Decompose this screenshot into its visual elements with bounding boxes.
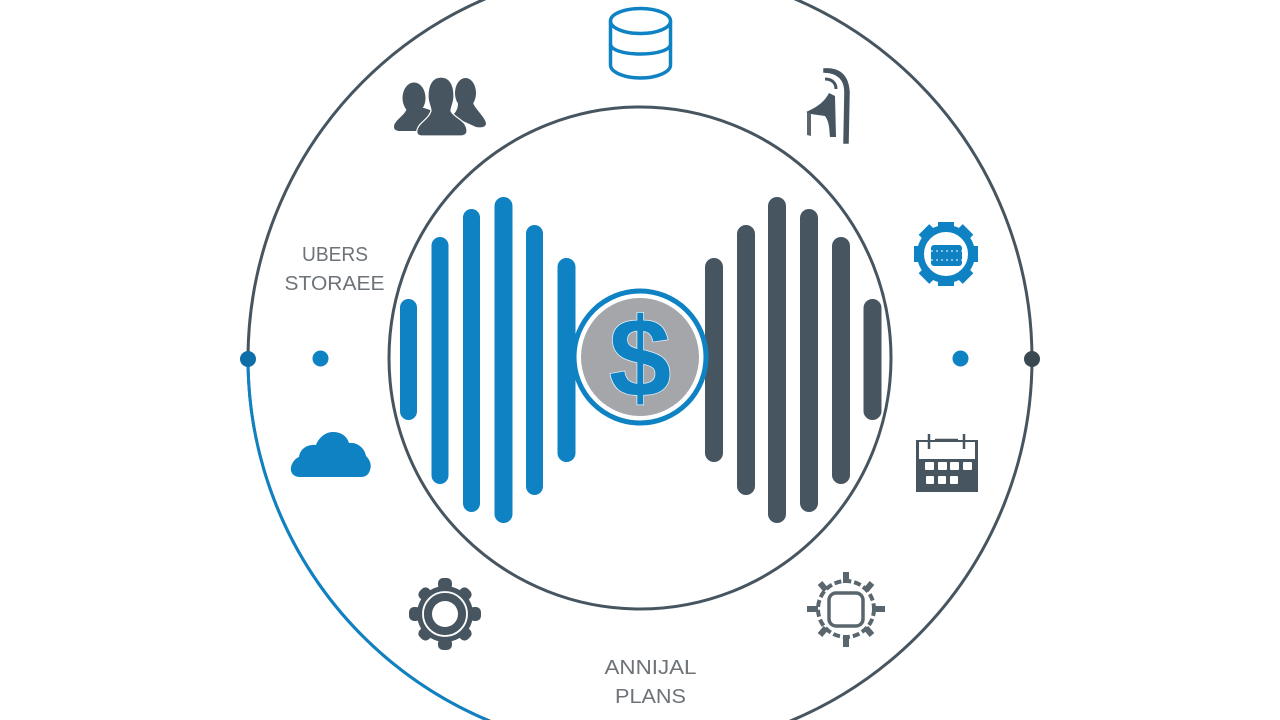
label: users storage: STORAEE (284, 272, 384, 295)
label: users storage (284, 243, 384, 295)
icon: calendar (916, 434, 978, 492)
icon: cloud (291, 432, 371, 477)
outer ring (248, 0, 1032, 720)
inner ring (389, 107, 891, 609)
icon: database (610, 8, 670, 78)
dot: right (952, 350, 968, 366)
label: annual plans (604, 656, 696, 708)
dark bars (705, 197, 882, 523)
label: annual plans: PLANS (615, 685, 686, 708)
blue bars (400, 197, 576, 523)
center dollar coin (572, 289, 708, 425)
ring node: left (240, 351, 256, 367)
dot: left (312, 350, 328, 366)
label: users storage: UBERS (302, 243, 368, 266)
icon: users (394, 77, 486, 136)
icon: blue gear (914, 222, 978, 286)
icon: chip gear (807, 572, 885, 647)
icon: abstract arch (806, 69, 849, 143)
icon: dark gear (409, 578, 481, 650)
label: annual plans: ANNIJAL (604, 656, 696, 679)
dollar sign: $ (609, 295, 671, 420)
ring node: right (1024, 351, 1040, 367)
